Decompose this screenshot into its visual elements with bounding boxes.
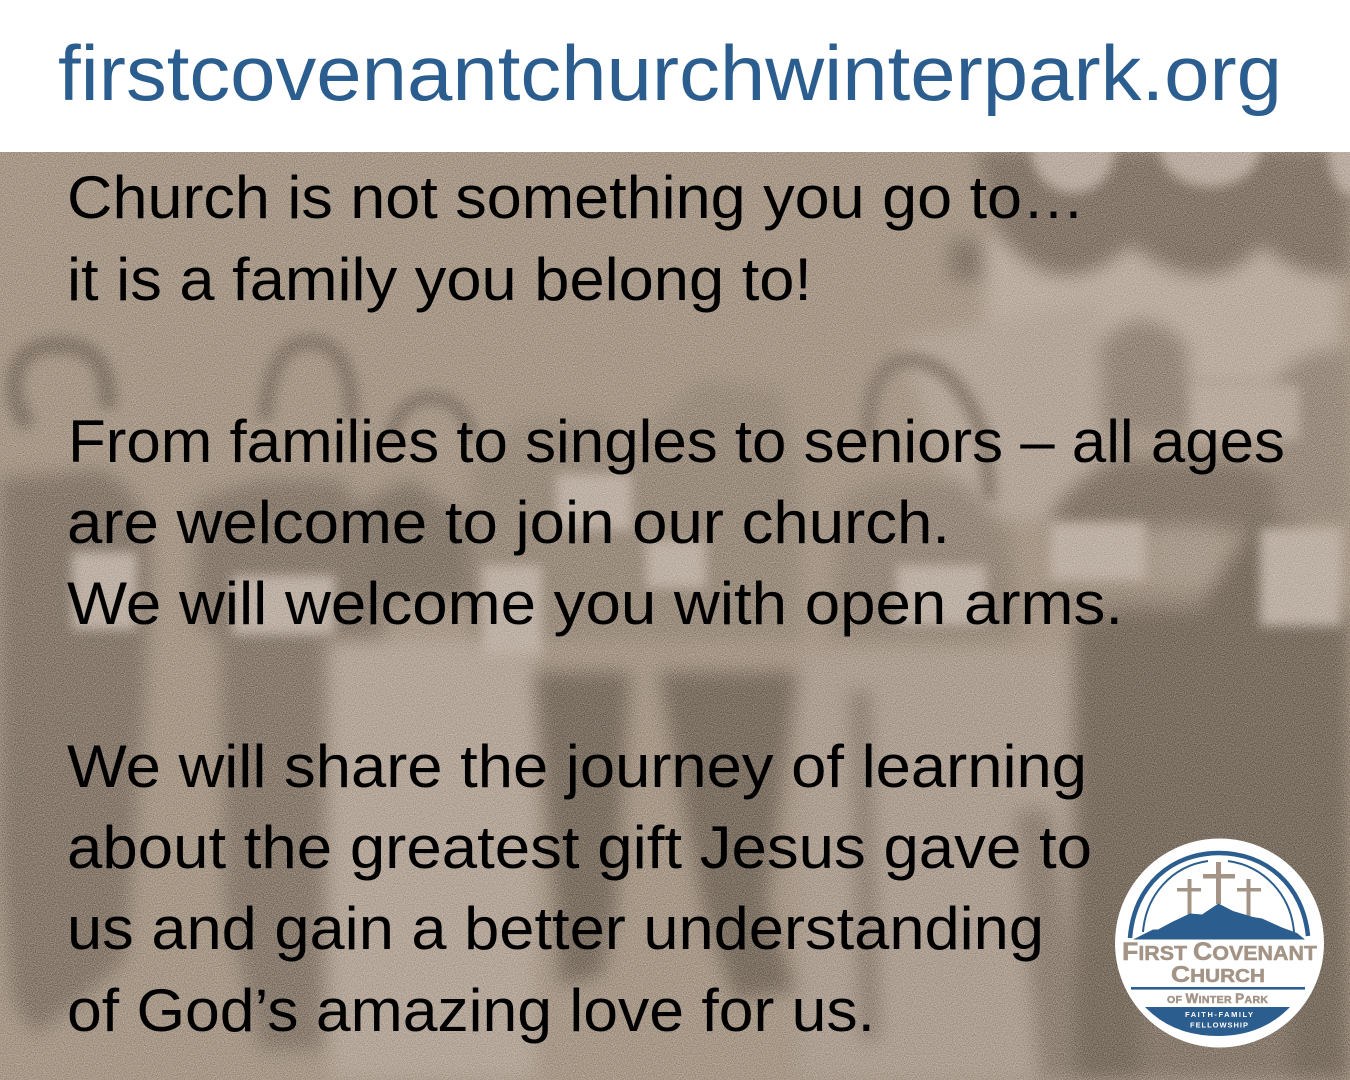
paragraph 2: are welcome to join our church. (67, 489, 950, 556)
icon: three crosses (1177, 862, 1261, 917)
left figure (0, 470, 150, 1035)
paragraph 3 (67, 733, 1092, 1044)
paragraph 3: We will share the journey of learning (67, 733, 1087, 800)
logo tagline banner: FAITH-FAMILY (1185, 1010, 1253, 1019)
paragraph 2: We will welcome you with open arms. (67, 570, 1123, 637)
second figure (195, 480, 385, 1050)
paragraph 1: Church is not something you go to… (67, 164, 1085, 231)
fifth figure (659, 672, 797, 1000)
paragraph 2 (67, 408, 1285, 637)
paragraph 3: us and gain a better understanding (67, 895, 1044, 962)
scallop highlights (1026, 152, 1120, 199)
sixth figure (830, 480, 1020, 640)
paragraph 3: about the greatest gift Jesus gave to (67, 814, 1092, 881)
paragraph 1 (67, 164, 1085, 313)
right figure (1100, 320, 1190, 430)
icon: outer and inner arcs (1130, 853, 1308, 938)
logo tagline banner: FELLOWSHIP (1190, 1020, 1248, 1030)
hair outlines (15, 345, 108, 425)
fourth figure (470, 420, 645, 640)
header band (0, 0, 1350, 152)
main message text (67, 164, 1285, 1044)
logo tagline banner (1145, 1007, 1290, 1036)
scalloped banner (975, 150, 1350, 276)
held certificates (72, 552, 137, 630)
icon: mountain (1133, 904, 1305, 940)
logo wordmark (1122, 938, 1317, 1006)
wall and light areas (985, 235, 1340, 385)
website url heading: firstcovenantchurchwinterpark.org (58, 29, 1282, 117)
paragraph 2: From families to singles to seniors – all ages (68, 408, 1285, 475)
third figure torso (365, 480, 478, 600)
paragraph 1: it is a family you belong to! (67, 246, 812, 313)
logo wordmark: CHURCH (1171, 961, 1265, 987)
church logo badge (1115, 838, 1324, 1048)
logo wordmark: FIRST COVENANT (1122, 938, 1317, 966)
logo wordmark: OF WINTER PARK (1167, 991, 1268, 1006)
paragraph 3: of God’s amazing love for us. (67, 977, 875, 1044)
